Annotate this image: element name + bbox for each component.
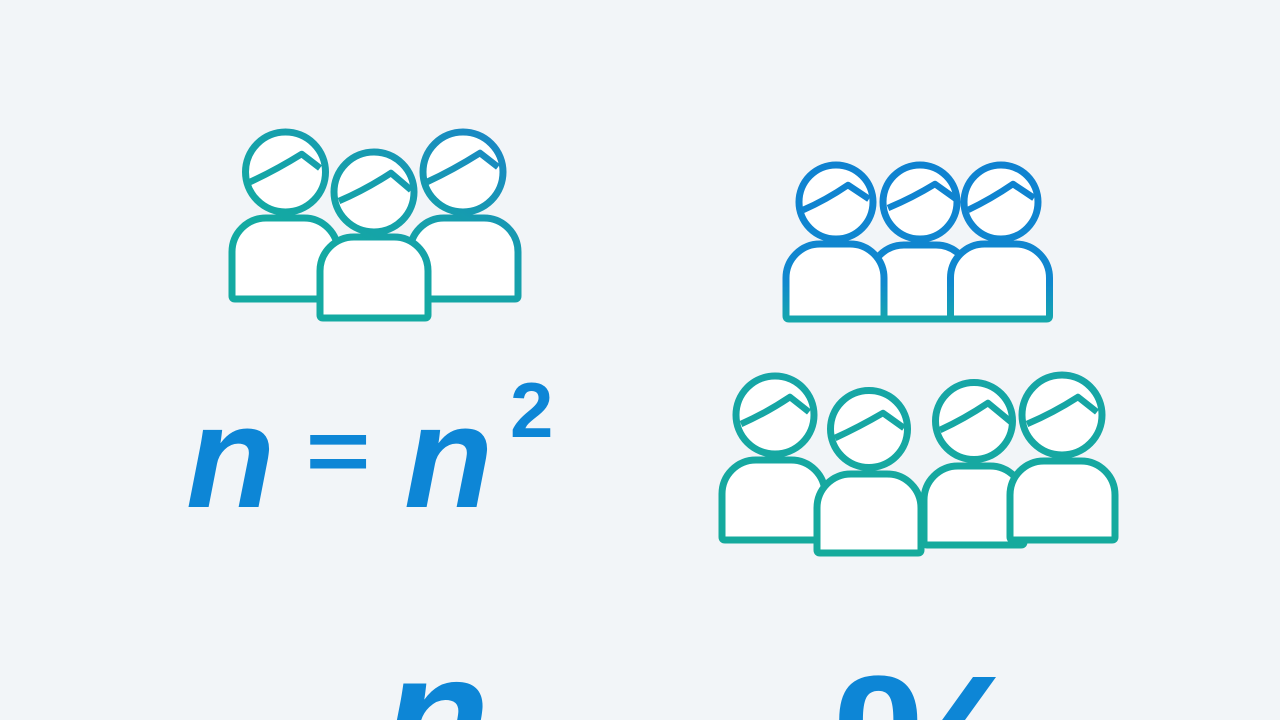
person: right xyxy=(410,132,518,299)
person: centre xyxy=(320,152,428,318)
letter n: n xyxy=(186,375,275,538)
icon: group of four people, teal, lower right xyxy=(722,375,1115,553)
letter n: n xyxy=(404,375,493,538)
person: first xyxy=(722,376,825,540)
person: left xyxy=(232,132,338,299)
formula: n = n squared xyxy=(186,366,553,538)
person: middle xyxy=(870,165,970,319)
icon: group of three people, teal, top left xyxy=(232,132,518,318)
exponent 2: 2 xyxy=(510,366,553,454)
person: fourth xyxy=(1010,375,1115,540)
person: right xyxy=(950,165,1050,319)
person: second xyxy=(817,390,921,553)
icon: group of three people, blue, top right xyxy=(786,165,1050,319)
person: left xyxy=(786,165,884,319)
equals sign: = xyxy=(306,401,371,500)
person: third xyxy=(924,382,1024,545)
